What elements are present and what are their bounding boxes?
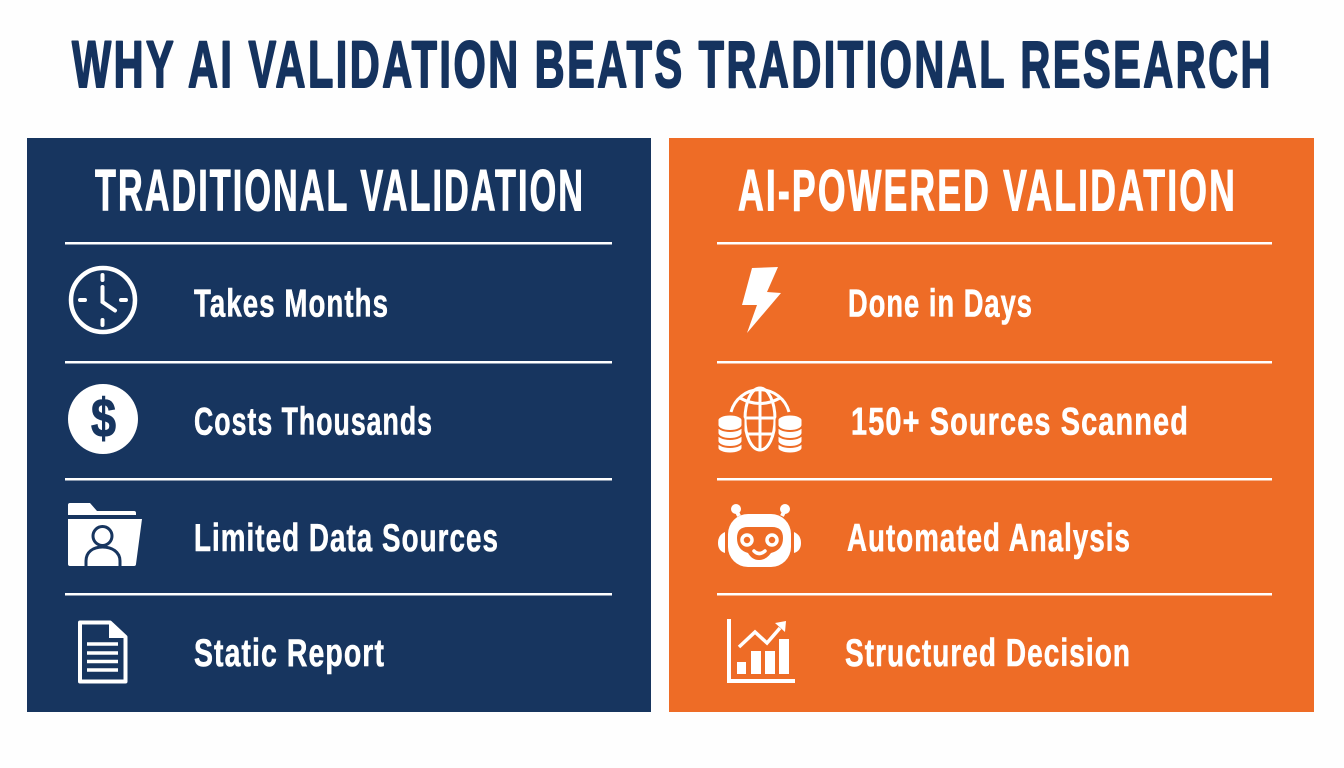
icon: dollar coin [68, 384, 138, 454]
heading: traditional validation: TRADITIONAL VALIDATION [95, 158, 585, 224]
text: 150+ sources scanned: 150+ Sources Scanned [851, 400, 1189, 444]
text: static report: Static Report [194, 632, 385, 675]
text: costs thousands: Costs Thousands [194, 400, 433, 444]
text: takes months: Takes Months [194, 282, 389, 326]
text: structured decision: Structured Decision [845, 632, 1131, 675]
icon: clock [71, 268, 135, 332]
icon: dollar coin: $ [91, 387, 116, 449]
icon: robot [718, 504, 801, 567]
icon: folder with person [68, 503, 142, 566]
panel: ai-powered validation [669, 138, 1314, 712]
icon: document [80, 622, 126, 682]
icon: lightning bolt [742, 267, 781, 333]
text: automated analysis: Automated Analysis [847, 517, 1131, 560]
icon: globe with data stacks [717, 388, 803, 454]
panel: traditional validation [27, 138, 651, 712]
text: limited data sources: Limited Data Sources [194, 517, 499, 560]
text: done in days: Done in Days [848, 282, 1033, 326]
icon: growth chart [729, 619, 795, 681]
